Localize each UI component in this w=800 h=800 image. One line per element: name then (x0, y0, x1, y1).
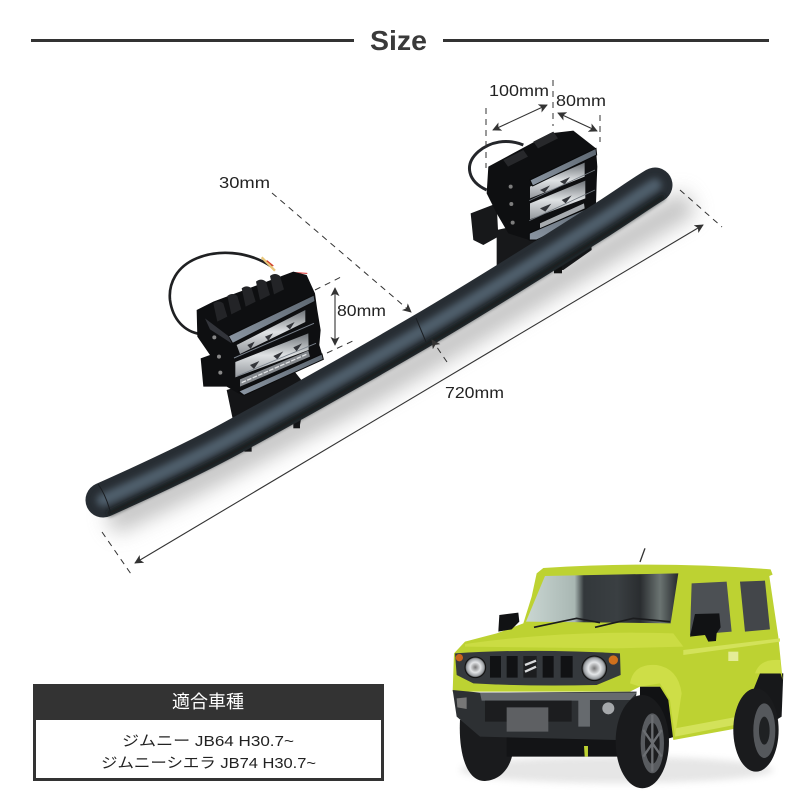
left light mounting bracket (227, 370, 307, 452)
side mirrors (498, 613, 721, 642)
table body text (101, 734, 316, 772)
grille and headlights (455, 651, 621, 686)
table body text: ジムニーシエラ JB74 H30.7~ (101, 756, 316, 772)
dimension: side 80mm (315, 276, 386, 353)
table header: 適合車種 (172, 692, 244, 712)
rear wheel (733, 688, 779, 772)
dimension: side 80mm: 80mm (337, 303, 386, 320)
windows (526, 573, 770, 635)
compatible vehicles table (33, 684, 384, 780)
dimension: 100mm (486, 80, 553, 168)
dimension: 30mm: 30mm (219, 175, 270, 192)
vehicle: yellow-green Jimny (453, 548, 783, 788)
front wheel (616, 695, 669, 788)
dimension: 100mm: 100mm (489, 83, 549, 100)
bar drop shadow (110, 202, 690, 522)
dimension: top 80mm (556, 93, 606, 142)
dimension: 30mm (219, 175, 447, 362)
table header (33, 684, 384, 720)
left LED light with cable (170, 253, 323, 396)
right light mounting bracket (471, 203, 592, 273)
body (453, 565, 783, 740)
front bumper (453, 690, 637, 757)
dimension: top 80mm: 80mm (556, 93, 606, 110)
table body text: ジムニー JB64 H30.7~ (122, 734, 294, 750)
right LED light with cable (470, 131, 597, 240)
black tube bar (98, 185, 664, 514)
title: Size: Size (370, 25, 427, 56)
dimension: 720mm (102, 190, 722, 574)
dimension: 720mm: 720mm (445, 385, 504, 402)
door details (728, 652, 738, 661)
